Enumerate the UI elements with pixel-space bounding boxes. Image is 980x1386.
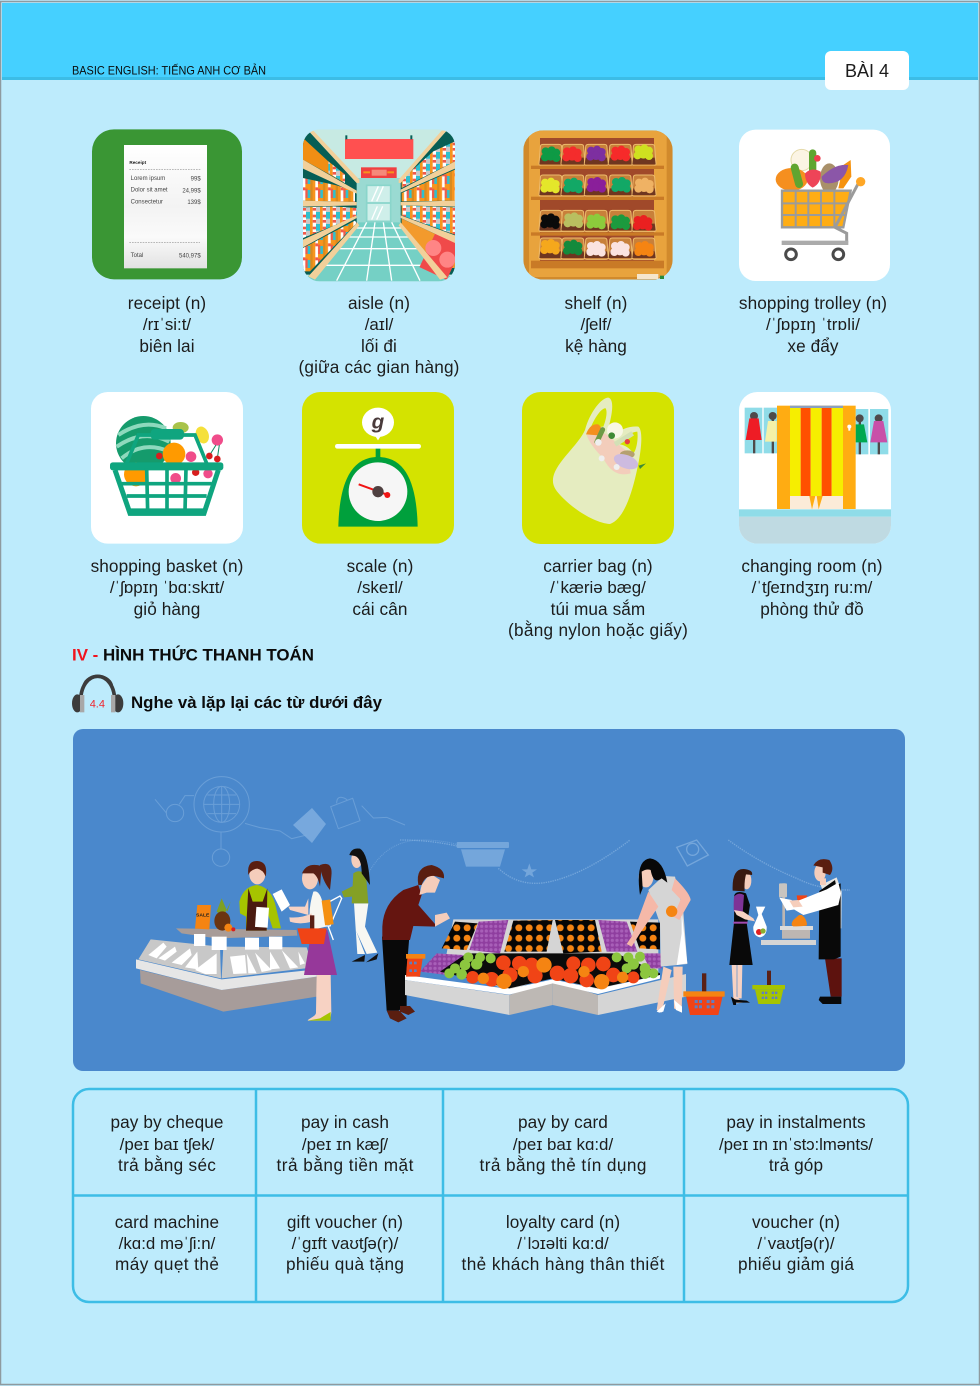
- cell: voucher: /ˈvaʊtʃə(r)/: [757, 1234, 835, 1253]
- label: changing room: [741, 556, 883, 619]
- label: shopping basket: shopping basket (n): [91, 556, 243, 576]
- checkout counter: [136, 898, 317, 1012]
- illustration panel: supermarket checkout scene: [73, 729, 905, 1071]
- card: changing room: [739, 392, 891, 619]
- icon: receipt: Total: [131, 253, 143, 259]
- cell: pay by card: /peɪ baɪ kɑ:d/: [513, 1135, 613, 1154]
- icon: changing room: [739, 392, 891, 544]
- person: shop assistant with apron: [789, 859, 842, 1004]
- label: aisle: lối đi: [361, 336, 397, 356]
- cell: loyalty card: loyalty card (n): [506, 1212, 620, 1232]
- cell: gift voucher: phiếu quà tặng: [286, 1254, 404, 1274]
- cell: gift voucher: /ˈgɪft vaʊtʃə(r)/: [292, 1234, 399, 1253]
- label: scale: scale (n): [347, 556, 413, 576]
- table grid: [73, 1089, 908, 1302]
- green basket on floor: [752, 971, 785, 1004]
- person: customer in black dress: [729, 869, 767, 1005]
- label: receipt: receipt (n): [128, 293, 206, 313]
- label: shopping basket: /ˈʃɒpɪŋ ˈbɑ:skɪt/: [110, 578, 224, 597]
- label: shopping basket: giỏ hàng: [134, 599, 200, 619]
- checkout counter: SALE: [196, 913, 210, 919]
- weighing scale on counter: [761, 883, 816, 945]
- card: carrier bag: [508, 392, 688, 640]
- listening instruction: Nghe và lặp lại các từ dưới đây: [131, 693, 383, 712]
- icon: kitchen scale: [302, 392, 454, 544]
- cell: gift voucher: gift voucher (n): [287, 1212, 403, 1232]
- person: woman with basket: [273, 864, 337, 1021]
- label: changing room: phòng thử đồ: [760, 599, 864, 619]
- label: changing room: /ˈtʃeɪndʒɪŋ ru:m/: [752, 578, 873, 597]
- person: man in maroon: [382, 865, 450, 1022]
- cell: pay in cash: [276, 1112, 414, 1175]
- cell: pay in instalments: /peɪ ɪn ɪnˈstɔ:lmənts/: [719, 1135, 873, 1154]
- label: shelf: kệ hàng: [565, 336, 627, 356]
- label: changing room: changing room (n): [741, 556, 883, 576]
- label: shelf: /ʃelf/: [581, 315, 612, 334]
- label: shopping basket: [91, 556, 243, 619]
- icon: shopping trolley: [739, 130, 890, 281]
- cell: voucher: [738, 1212, 854, 1274]
- label: scale: [347, 556, 413, 619]
- cell: card machine: /kɑ:d məˈʃi:n/: [119, 1234, 216, 1253]
- card: scale: [302, 392, 454, 619]
- icon: receipt: [92, 129, 242, 279]
- cell: voucher: phiếu giảm giá: [738, 1254, 854, 1274]
- icon: receipt: 540,97$: [179, 253, 201, 259]
- label: receipt: /rɪˈsi:t/: [143, 315, 191, 334]
- icon: shopping basket: [91, 392, 243, 544]
- cell: pay by card: trả bằng thẻ tín dụng: [480, 1155, 646, 1175]
- icon: receipt: Lorem ipsum: [131, 176, 165, 182]
- label: shelf: shelf (n): [564, 293, 628, 313]
- cell: loyalty card: thẻ khách hàng thân thiết: [462, 1254, 665, 1274]
- icon: carrier bag: [553, 398, 646, 524]
- vocabulary table: payment: [73, 1089, 908, 1302]
- label: scale: /skeɪl/: [357, 578, 403, 597]
- label: carrier bag: /ˈkæriə bæg/: [550, 578, 646, 597]
- person: woman in white dress: [627, 858, 691, 1013]
- cell: loyalty card: [462, 1212, 665, 1274]
- icon: kitchen scale: g: [371, 411, 385, 434]
- label: shopping trolley: [739, 293, 887, 356]
- label: carrier bag: túi mua sắm: [551, 599, 645, 619]
- red basket by man: [406, 954, 425, 977]
- icon: supermarket aisle: [303, 129, 463, 281]
- decorative network icons: [155, 777, 458, 873]
- card: shopping trolley: [739, 130, 890, 356]
- card: shelf: [523, 130, 673, 356]
- header running title: BASIC ENGLISH: TIẾNG ANH CƠ BẢN: [72, 64, 266, 78]
- icon: receipt: Consectetur: [131, 199, 163, 205]
- label: carrier bag: carrier bag (n): [543, 556, 653, 576]
- cell: pay in cash: trả bằng tiền mặt: [276, 1155, 414, 1175]
- card: shopping basket: [91, 392, 243, 619]
- label: aisle: aisle (n): [348, 293, 410, 313]
- icon: headphones with track number: 4.4: [90, 699, 105, 711]
- decorative basket and waves: [400, 840, 850, 890]
- person: woman with trolley: [322, 848, 378, 962]
- lesson badge: [825, 51, 909, 90]
- cell: pay by card: [480, 1112, 646, 1175]
- icon: receipt: Dolor sit amet: [131, 188, 168, 194]
- person: cashier: [239, 861, 281, 931]
- red basket on floor: [683, 973, 725, 1015]
- label: shelf: [564, 293, 628, 356]
- cell: pay in instalments: trả góp: [769, 1155, 823, 1175]
- icon: receipt: 99$: [191, 177, 201, 183]
- label: shopping trolley: shopping trolley (n): [739, 293, 887, 313]
- label: aisle: (giữa các gian hàng): [298, 357, 460, 377]
- header band: [2, 3, 978, 80]
- icon: receipt: Receipt: [129, 160, 147, 165]
- cell: pay by cheque: pay by cheque: [110, 1112, 224, 1132]
- cell: voucher: voucher (n): [752, 1212, 840, 1232]
- cell: pay in cash: /peɪ ɪn kæʃ/: [302, 1135, 388, 1154]
- label: aisle: /aɪl/: [365, 315, 394, 334]
- cell: pay by cheque: /peɪ baɪ tʃek/: [120, 1135, 215, 1154]
- cell: pay in cash: pay in cash: [301, 1112, 389, 1132]
- label: scale: cái cân: [352, 599, 408, 619]
- lesson badge: BÀI 4: [845, 61, 889, 81]
- label: carrier bag: [508, 556, 688, 640]
- cell: pay by cheque: [110, 1112, 224, 1175]
- cell: card machine: card machine: [115, 1212, 219, 1232]
- cell: card machine: máy quẹt thẻ: [115, 1254, 219, 1274]
- cell: loyalty card: /ˈlɔɪəlti kɑ:d/: [517, 1234, 609, 1253]
- icon: shelf: [523, 130, 673, 280]
- cell: pay in instalments: pay in instalments: [726, 1112, 866, 1132]
- cell: card machine: [115, 1212, 219, 1274]
- label: shopping trolley: /ˈʃɒpɪŋ ˈtrɒli/: [766, 315, 860, 334]
- icon: receipt: 139$: [187, 200, 201, 206]
- card: receipt: [92, 129, 242, 356]
- card: aisle: [298, 129, 463, 377]
- label: shopping trolley: xe đẩy: [787, 336, 839, 356]
- icon tile: carrier bag: [522, 392, 674, 544]
- cell: pay by card: pay by card: [518, 1112, 608, 1132]
- produce display: [405, 919, 686, 1015]
- section heading: IV - HÌNH THỨC THANH TOÁN: [72, 646, 314, 664]
- label: carrier bag: (bằng nylon hoặc giấy): [508, 620, 688, 640]
- label: receipt: [128, 293, 206, 356]
- cell: gift voucher: [286, 1212, 404, 1274]
- cell: pay in instalments: [719, 1112, 873, 1175]
- label: aisle: [298, 293, 460, 377]
- icon: headphones with track number: [72, 676, 123, 712]
- decorative shopping bag: [293, 808, 326, 843]
- icon: receipt: 24,99$: [182, 188, 201, 194]
- label: receipt: biên lai: [139, 336, 195, 356]
- cell: pay by cheque: trả bằng séc: [118, 1155, 216, 1175]
